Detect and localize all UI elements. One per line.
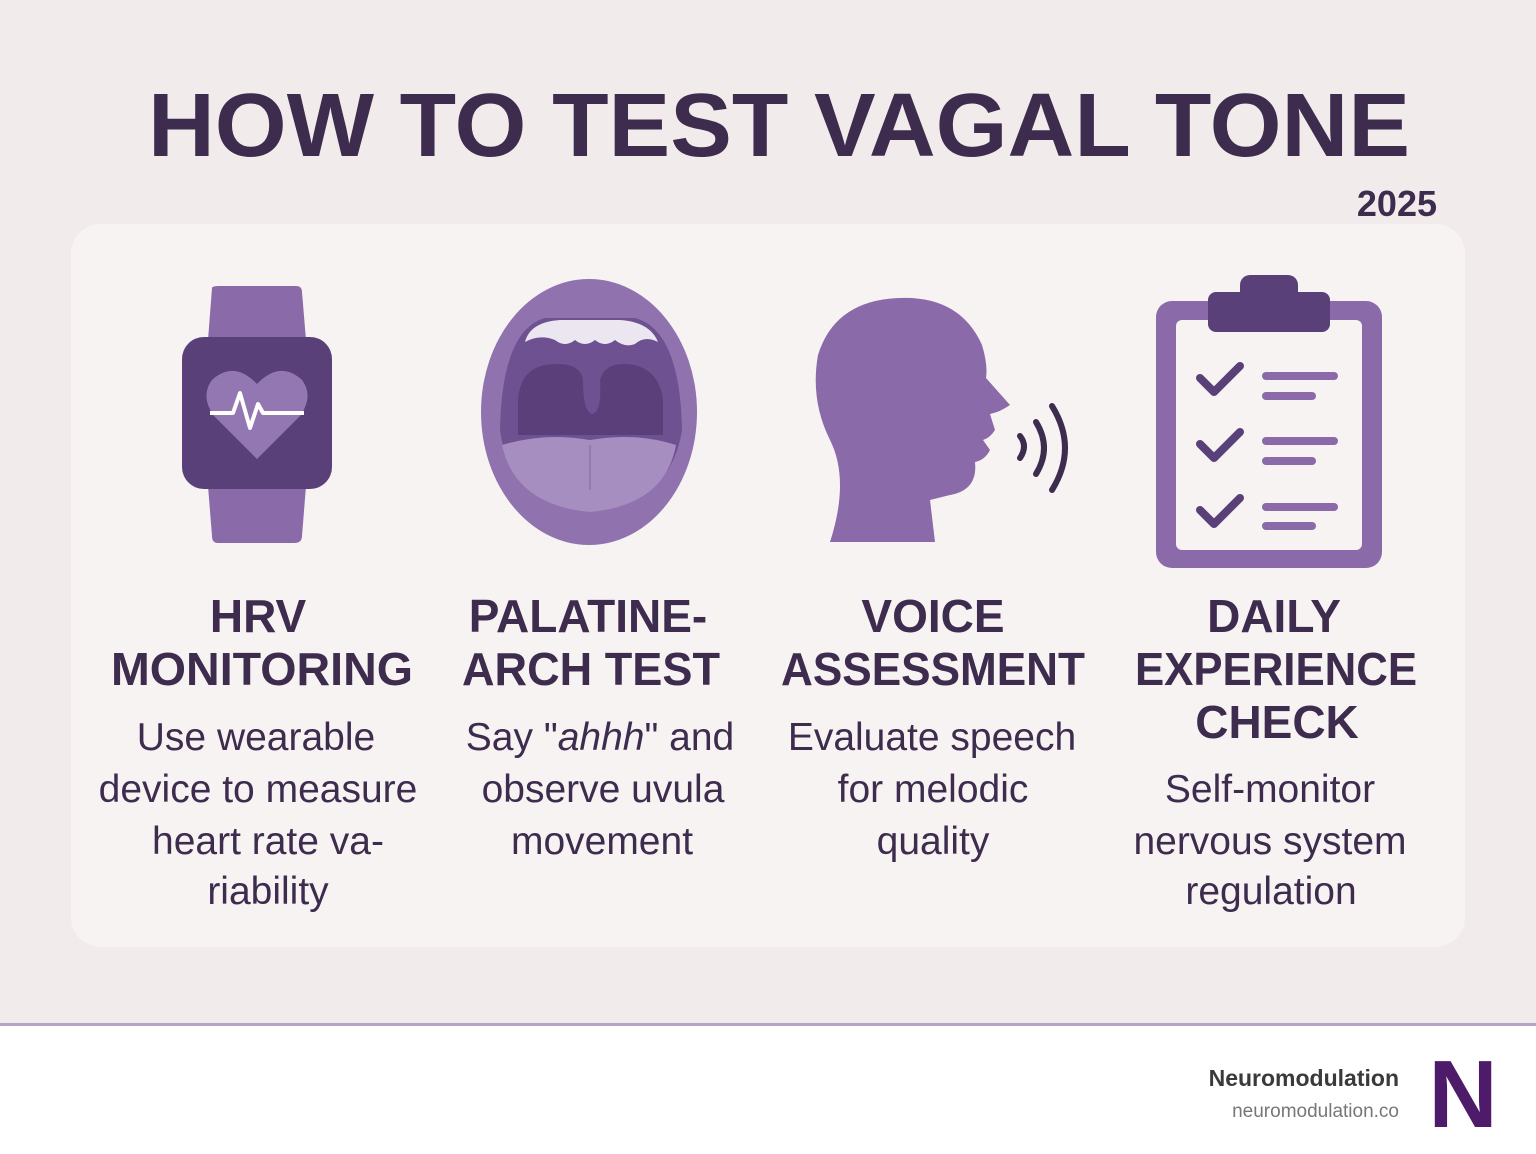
- text: palatine description: observe uvula: [482, 768, 725, 811]
- heading: voice assessment: [781, 590, 1085, 695]
- heading: palatine-arch test: [462, 590, 720, 695]
- icon: speaking head: [816, 298, 1065, 542]
- icon: open mouth: [481, 279, 697, 545]
- heading: voice assessment: VOICE: [861, 590, 1005, 642]
- brand name: Neuromodulation: [1209, 1065, 1399, 1091]
- text: daily description: Self-monitor: [1165, 768, 1375, 811]
- text: daily description: nervous system: [1133, 820, 1407, 863]
- heading: daily experience check: EXPERIENCE: [1135, 643, 1417, 695]
- heading: daily experience check: [1135, 590, 1417, 748]
- text: HRV description: Use wearable: [137, 716, 375, 759]
- text: HRV description: riability: [207, 870, 329, 913]
- text: voice description: [788, 716, 1076, 863]
- icon: smartwatch: [182, 286, 332, 543]
- text: voice description: for melodic: [838, 768, 1028, 811]
- text: voice description: Evaluate speech: [788, 716, 1076, 759]
- text: HRV description: device to measure: [99, 768, 417, 811]
- heading: daily experience check: DAILY: [1207, 590, 1341, 642]
- text: daily description: regulation: [1185, 870, 1357, 913]
- heading: voice assessment: ASSESSMENT: [781, 643, 1085, 695]
- text: palatine description: [466, 716, 734, 863]
- heading: HRV monitoring: [111, 590, 413, 695]
- text: voice description: quality: [877, 820, 990, 863]
- logo: N: N: [1428, 1041, 1498, 1148]
- heading: palatine-arch test: ARCH TEST: [462, 643, 720, 695]
- heading: daily experience check: CHECK: [1195, 696, 1359, 748]
- brand name: neuromodulation.co: [1232, 1101, 1399, 1122]
- brand name: [1209, 1065, 1399, 1122]
- heading: palatine-arch test: PALATINE-: [469, 590, 707, 642]
- text: daily description: [1133, 768, 1407, 913]
- heading: HRV monitoring: MONITORING: [111, 643, 413, 695]
- year label: 2025: [1357, 183, 1437, 224]
- text: palatine description: movement: [511, 820, 693, 863]
- panel: main card: [71, 224, 1465, 947]
- footer: [0, 1023, 1536, 1154]
- icon: clipboard checklist: [1156, 275, 1382, 568]
- text: HRV description: heart rate va-: [152, 820, 384, 863]
- text: palatine description: Say "ahhh" and: [466, 716, 734, 759]
- title: HOW TO TEST VAGAL TONE: [148, 76, 1410, 176]
- text: HRV description: [99, 716, 417, 913]
- heading: HRV monitoring: HRV: [210, 590, 306, 642]
